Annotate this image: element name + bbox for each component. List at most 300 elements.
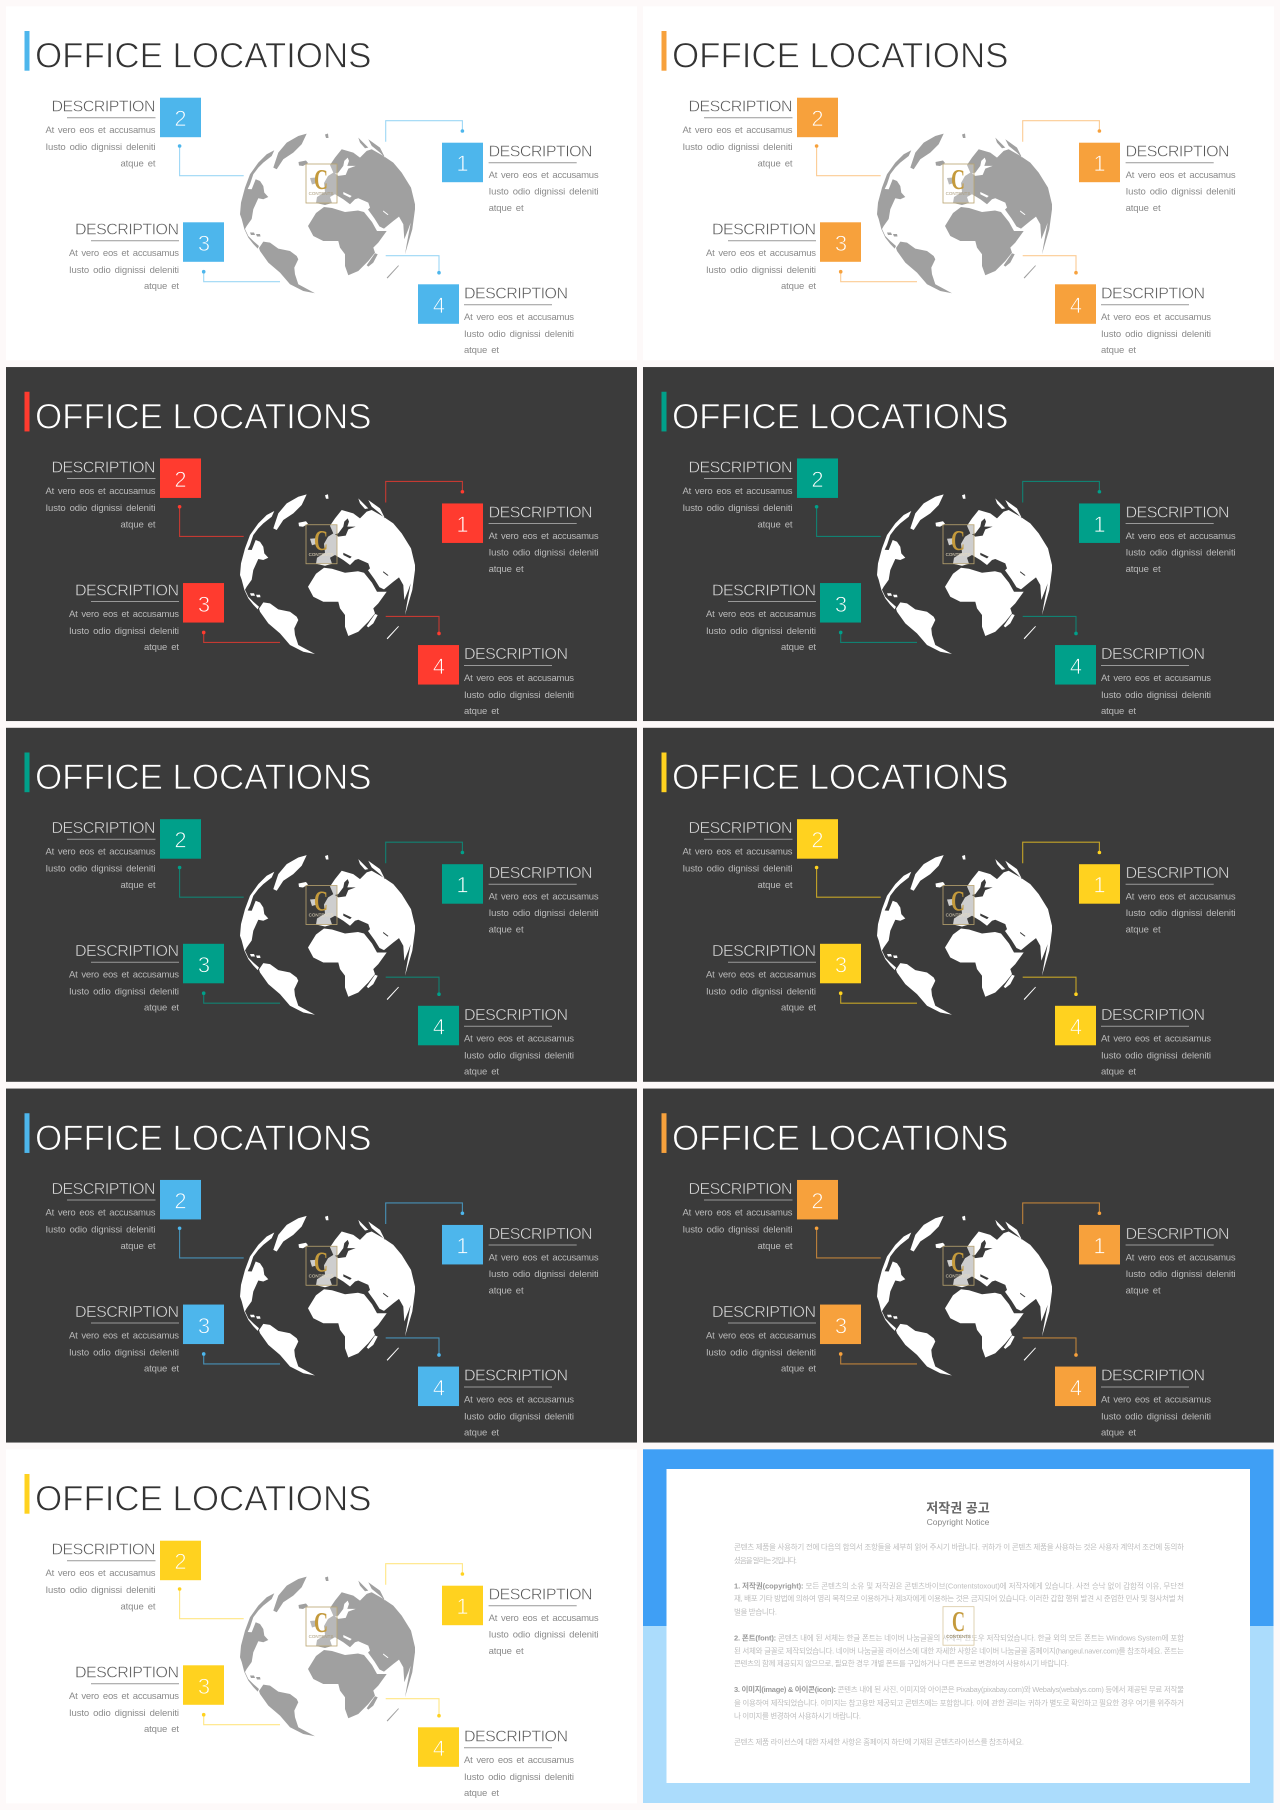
icon: globe	[240, 134, 415, 293]
slide 1: blue on white	[6, 6, 637, 360]
callout 3: At vero eos et accusamus	[69, 248, 179, 259]
title accent bar	[662, 752, 666, 792]
callout 4: At vero eos et accusamus	[464, 1394, 574, 1405]
callout 2: At vero eos et accusamus	[46, 1207, 156, 1218]
logo watermark: CONTENTS	[946, 912, 970, 918]
callout 2: 2	[174, 1549, 187, 1574]
logo watermark: C	[951, 525, 965, 557]
callout 4: At vero eos et accusamus	[1101, 1034, 1211, 1044]
connectors	[178, 121, 464, 282]
logo watermark: CONTENTS	[309, 552, 333, 557]
callout 4: Iusto odio dignissi deleniti	[464, 1411, 574, 1422]
callout 2: 2	[174, 828, 187, 852]
callout 1: atque et	[489, 1646, 524, 1657]
callout 4: 4	[433, 293, 445, 318]
callout 1: Iusto odio dignissi deleniti	[1126, 186, 1236, 198]
callout 4: Iusto odio dignissi deleniti	[464, 329, 574, 340]
logo watermark: CONTENTS	[946, 552, 970, 557]
callout 3: DESCRIPTION	[75, 1304, 179, 1321]
slide 9: yellow on white	[6, 1449, 637, 1803]
callout 1: At vero eos et accusamus	[1126, 170, 1236, 181]
notice subheading: Copyright Notice	[927, 1517, 990, 1527]
callout 4: 4	[433, 1014, 445, 1040]
callout 3: At vero eos et accusamus	[706, 248, 816, 259]
callout 4: At vero eos et accusamus	[1101, 673, 1211, 684]
callout 2: atque et	[758, 880, 793, 891]
callout 1: At vero eos et accusamus	[1126, 892, 1236, 902]
connectors	[178, 1564, 464, 1725]
slide background	[6, 728, 637, 1082]
panel: copyright notice slide	[643, 1449, 1274, 1803]
notice body text: 을 이용하여 제작되었습니다. 이미지는 참고용만 제공되고 콘텐츠에는 포함합니다. 이에 관한 권리는 귀하가 별도로 확인하고 필요한 경우 여기를 위주하거	[734, 1698, 1184, 1708]
callout 3: At vero eos et accusamus	[706, 970, 816, 980]
callout 4: 4	[1070, 1014, 1082, 1040]
callout 2: Iusto odio dignissi deleniti	[46, 142, 156, 153]
connectors	[815, 121, 1101, 282]
title accent bar	[662, 392, 666, 431]
callout 4: DESCRIPTION	[464, 285, 568, 302]
title: OFFICE LOCATIONS	[35, 37, 372, 76]
logo watermark	[943, 886, 974, 924]
callout 2: At vero eos et accusamus	[46, 1568, 156, 1579]
callout 4: DESCRIPTION	[1101, 1368, 1205, 1385]
callout 4: Iusto odio dignissi deleniti	[464, 1772, 574, 1783]
callout 4: Iusto odio dignissi deleniti	[1101, 1050, 1211, 1062]
callout 3: 3	[198, 1313, 210, 1338]
callout 1	[1079, 1225, 1236, 1296]
callout 2: DESCRIPTION	[52, 459, 156, 476]
callout 4: atque et	[464, 706, 499, 717]
callout 4: DESCRIPTION	[464, 646, 568, 663]
callout 2: At vero eos et accusamus	[682, 1207, 793, 1218]
callout 2: DESCRIPTION	[52, 820, 156, 837]
callout 1: DESCRIPTION	[489, 1586, 593, 1604]
title: OFFICE LOCATIONS	[672, 1119, 1008, 1158]
title: OFFICE LOCATIONS	[35, 1119, 372, 1158]
callout 4: 4	[1070, 293, 1082, 318]
callout 2: At vero eos et accusamus	[46, 486, 156, 497]
callout 3: DESCRIPTION	[75, 1664, 179, 1682]
callout 3: DESCRIPTION	[75, 222, 179, 238]
title accent bar	[662, 1113, 666, 1153]
callout 1: atque et	[1126, 1285, 1161, 1296]
callout 3	[706, 943, 861, 1014]
callout 3: atque et	[144, 1724, 179, 1735]
callout 3: 3	[835, 1313, 847, 1338]
title: OFFICE LOCATIONS	[35, 1480, 372, 1519]
connectors	[815, 481, 1101, 642]
callout 4: DESCRIPTION	[464, 1368, 568, 1385]
callout 2: 2	[174, 467, 187, 492]
callout 2: At vero eos et accusamus	[46, 846, 156, 858]
title: OFFICE LOCATIONS	[35, 758, 372, 797]
callout 2: Iusto odio dignissi deleniti	[682, 864, 792, 874]
callout 4: atque et	[464, 1427, 499, 1438]
callout 4: DESCRIPTION	[1101, 1007, 1205, 1024]
callout 4: DESCRIPTION	[1101, 285, 1205, 302]
logo watermark	[306, 525, 337, 564]
callout 4: At vero eos et accusamus	[464, 1755, 574, 1766]
callout 4: 4	[433, 1375, 445, 1400]
callout 4: atque et	[1101, 706, 1136, 717]
callout 1: atque et	[489, 924, 524, 936]
blue frame top	[643, 1449, 1274, 1626]
icon: globe	[240, 1216, 415, 1376]
callout 1: DESCRIPTION	[1126, 144, 1230, 160]
title accent bar	[24, 752, 30, 792]
callout 2: atque et	[120, 158, 156, 170]
callout 2: atque et	[120, 1241, 156, 1252]
logo watermark: C	[314, 886, 328, 918]
callout 3: DESCRIPTION	[712, 582, 816, 599]
callout 1: DESCRIPTION	[489, 504, 593, 521]
logo watermark: C	[314, 1607, 328, 1639]
callout 3: 3	[835, 952, 847, 978]
callout 1: At vero eos et accusamus	[1126, 531, 1236, 542]
callout 4: atque et	[1101, 1427, 1136, 1438]
slide background	[6, 6, 637, 360]
callout 1: 1	[456, 1594, 469, 1619]
title: OFFICE LOCATIONS	[672, 397, 1008, 436]
callout 1: DESCRIPTION	[489, 865, 593, 882]
logo watermark: CONTENTS	[946, 1634, 971, 1639]
callout 3	[706, 222, 861, 292]
callout 4: DESCRIPTION	[1101, 646, 1205, 663]
callout 3: Iusto odio dignissi deleniti	[706, 265, 816, 276]
callout 2: DESCRIPTION	[52, 98, 156, 116]
callout 3: atque et	[144, 281, 179, 292]
notice body text: 콘텐츠의 함께 제공되지 않으므로, 필요한 경우 개별 폰트를 구입하거나 다른 폰트로 변경하여 사용하시기 바랍니다.	[734, 1658, 1069, 1668]
callout 4	[1055, 1006, 1211, 1078]
callout 2: Iusto odio dignissi deleniti	[682, 142, 792, 153]
callout 4	[418, 1727, 574, 1799]
notice body text: 된 서체와 글꼴로 제작되었습니다. 네이버 나눔글꼴 라이선스에 대한 자세한 사항은 네이버 나눔글꼴 홈페이지(hangeul.naver.com)를 참조하세요. 폰트는	[734, 1646, 1184, 1656]
callout 2: Iusto odio dignissi deleniti	[46, 864, 156, 874]
title accent bar	[24, 392, 30, 431]
callout 3	[69, 582, 224, 653]
icon: globe	[240, 494, 415, 654]
icon: globe	[877, 494, 1052, 654]
callout 1: Iusto odio dignissi deleniti	[1126, 908, 1236, 919]
callout 2	[682, 458, 838, 530]
callout 1	[442, 143, 599, 214]
callout 4: Iusto odio dignissi deleniti	[1101, 690, 1211, 701]
callout 3: Iusto odio dignissi deleniti	[69, 626, 179, 637]
title: OFFICE LOCATIONS	[672, 37, 1008, 76]
callout 2: 2	[174, 106, 187, 131]
callout 2: atque et	[758, 519, 793, 530]
callout 2: DESCRIPTION	[52, 1181, 156, 1198]
callout 3	[69, 1664, 224, 1735]
slide 6: yellow on dark	[643, 728, 1274, 1082]
callout 2: At vero eos et accusamus	[682, 846, 793, 858]
callout 3: atque et	[781, 642, 816, 653]
callout 1: 1	[456, 151, 469, 176]
callout 3: atque et	[144, 1363, 179, 1374]
callout 4	[1055, 645, 1211, 717]
title accent bar	[662, 31, 666, 71]
callout 3: At vero eos et accusamus	[69, 609, 179, 620]
logo watermark: CONTENTS	[946, 191, 970, 196]
callout 3: Iusto odio dignissi deleniti	[69, 265, 179, 276]
callout 3: At vero eos et accusamus	[706, 1330, 816, 1341]
connectors	[178, 1203, 464, 1364]
callout 3: DESCRIPTION	[75, 582, 179, 599]
callout 1: 1	[456, 512, 469, 537]
callout 3: DESCRIPTION	[712, 943, 816, 960]
callout 3: DESCRIPTION	[712, 1304, 816, 1321]
callout 1: DESCRIPTION	[1126, 504, 1230, 521]
title accent bar	[24, 1113, 30, 1153]
callout 3: Iusto odio dignissi deleniti	[706, 1347, 816, 1358]
icon: globe	[240, 855, 415, 1015]
logo watermark: C	[314, 525, 328, 557]
callout 2: Iusto odio dignissi deleniti	[682, 503, 792, 514]
callout 1: 1	[1093, 872, 1106, 898]
callout 3: atque et	[144, 1002, 179, 1014]
icon: globe	[240, 1576, 415, 1736]
slide 3: red on dark	[6, 367, 637, 721]
logo watermark	[306, 164, 337, 203]
title accent bar	[24, 1474, 30, 1514]
callout 1: At vero eos et accusamus	[489, 170, 599, 181]
icon: globe	[877, 134, 1052, 293]
callout 4	[418, 1367, 574, 1438]
logo watermark	[306, 886, 337, 924]
callout 4	[418, 284, 574, 356]
callout 4	[1055, 1367, 1211, 1438]
callout 4: At vero eos et accusamus	[1101, 1394, 1211, 1405]
callout 1: At vero eos et accusamus	[489, 531, 599, 542]
callout 3: Iusto odio dignissi deleniti	[706, 986, 816, 998]
logo watermark	[943, 525, 974, 564]
callout 3	[69, 1304, 224, 1374]
callout 2: DESCRIPTION	[688, 820, 792, 837]
callout 3: Iusto odio dignissi deleniti	[69, 1708, 179, 1719]
callout 1: Iusto odio dignissi deleniti	[1126, 547, 1236, 558]
callout 2: Iusto odio dignissi deleniti	[46, 1585, 156, 1596]
callout 2: At vero eos et accusamus	[682, 125, 793, 136]
logo watermark	[943, 1246, 974, 1285]
callout 2	[46, 1541, 201, 1612]
callout 2: DESCRIPTION	[688, 1181, 792, 1198]
callout 1: At vero eos et accusamus	[1126, 1252, 1236, 1263]
callout 1: 1	[1093, 1233, 1106, 1258]
callout 4: atque et	[464, 1788, 499, 1799]
callout 3: 3	[835, 592, 847, 617]
callout 3	[706, 582, 861, 653]
callout 1	[1079, 864, 1236, 936]
callout 1: atque et	[489, 203, 524, 214]
notice body text: 벌을 받습니다.	[734, 1606, 777, 1616]
logo watermark: C	[951, 164, 965, 196]
callout 3: Iusto odio dignissi deleniti	[69, 1347, 179, 1358]
callout 2: DESCRIPTION	[52, 1542, 156, 1558]
callout 2: At vero eos et accusamus	[46, 125, 156, 136]
logo watermark	[943, 164, 974, 203]
notice body text: 셨음을 알리는 것입니다.	[734, 1555, 797, 1565]
notice body text	[734, 1542, 1184, 1746]
callout 4: Iusto odio dignissi deleniti	[1101, 1411, 1211, 1422]
callout 2: 2	[811, 828, 824, 852]
light blue frame bottom	[643, 1626, 1274, 1803]
callout 2: atque et	[120, 880, 156, 891]
callout 4: At vero eos et accusamus	[464, 673, 574, 684]
callout 1: atque et	[1126, 924, 1161, 936]
callout 4	[418, 1006, 574, 1078]
callout 4: At vero eos et accusamus	[464, 1034, 574, 1044]
logo watermark: C	[951, 1246, 965, 1278]
callout 3: At vero eos et accusamus	[69, 1330, 179, 1341]
title: OFFICE LOCATIONS	[35, 397, 372, 436]
connectors	[178, 481, 464, 642]
notice body text: 콘텐츠 제품을 사용하기 전에 다음의 합의서 조항들을 세부히 읽어 주시기 바랍니다. 귀하가 이 콘텐츠 제품을 사용하는 것은 사용자 계약서 조건에 동의하	[734, 1542, 1184, 1552]
callout 1: 1	[456, 1233, 469, 1258]
connectors	[178, 842, 464, 1003]
callout 3: atque et	[781, 281, 816, 292]
callout 2: 2	[811, 467, 824, 492]
callout 2: Iusto odio dignissi deleniti	[46, 503, 156, 514]
callout 2: 2	[174, 1188, 187, 1213]
callout 1: Iusto odio dignissi deleniti	[489, 547, 599, 558]
callout 1: 1	[1093, 151, 1106, 176]
callout 2: atque et	[758, 158, 793, 170]
callout 1	[442, 864, 599, 936]
callout 2	[46, 98, 201, 170]
callout 4: 4	[433, 1736, 445, 1761]
slide background	[643, 1089, 1274, 1443]
callout 2: At vero eos et accusamus	[682, 486, 793, 497]
notice body text: 재, 배포 기타 방법에 의하여 영리 목적으로 이용하거나 제3자에게 이용하는 것은 금지되어 있습니다. 이러한 갑합 행위 발견 시 준엄한 민사 및 형사처벌 처	[734, 1593, 1184, 1603]
logo watermark: C	[951, 886, 965, 918]
callout 4: 4	[1070, 1375, 1082, 1400]
callout 4: At vero eos et accusamus	[1101, 312, 1211, 323]
callout 4: atque et	[464, 345, 499, 356]
callout 4	[1055, 284, 1211, 356]
callout 3: 3	[198, 231, 210, 256]
slide 8: orange on dark	[643, 1089, 1274, 1443]
callout 3: DESCRIPTION	[75, 943, 179, 960]
notice body text: 2. 폰트(font): 콘텐츠 내에 된 서체는 한글 폰트는 네이버 나눔글꼴의 서체와 윈도우 저작되었습니다. 한글 외의 모든 폰트는 Windows System에 포함	[734, 1632, 1184, 1642]
callout 3: At vero eos et accusamus	[706, 609, 816, 620]
callout 3: Iusto odio dignissi deleniti	[69, 986, 179, 998]
callout 4: Iusto odio dignissi deleniti	[464, 690, 574, 701]
callout 4: At vero eos et accusamus	[464, 312, 574, 323]
icon: globe	[877, 855, 1052, 1015]
callout 1: DESCRIPTION	[1126, 1226, 1230, 1243]
callout 3	[69, 222, 224, 292]
slide 5: teal on dark	[6, 728, 637, 1082]
notice heading: 저작권 공고	[926, 1500, 990, 1516]
callout 1: DESCRIPTION	[489, 1226, 593, 1243]
callout 1: atque et	[489, 1285, 524, 1296]
callout 4: atque et	[1101, 345, 1136, 356]
callout 1: atque et	[489, 564, 524, 575]
logo watermark: C	[952, 1606, 965, 1638]
callout 4: atque et	[1101, 1066, 1136, 1078]
callout 1: Iusto odio dignissi deleniti	[489, 1630, 599, 1640]
callout 1: 1	[1093, 512, 1106, 537]
callout 1: Iusto odio dignissi deleniti	[489, 1269, 599, 1280]
slide background	[643, 728, 1274, 1082]
notice body text: 3. 이미지(image) & 아이콘(icon): 콘텐츠 내에 된 사진, 이미지와 아이콘은 Pixabay(pixabay.com)와 Webalys(webalys.com) 등에서 제공된 무료 저작물	[734, 1684, 1184, 1694]
callout 2: atque et	[758, 1241, 793, 1252]
callout 3: atque et	[144, 642, 179, 653]
logo watermark	[306, 1607, 337, 1646]
callout 1: atque et	[1126, 203, 1161, 214]
callout 1	[442, 1586, 599, 1657]
callout 1	[442, 503, 599, 575]
callout 4: 4	[1070, 654, 1082, 679]
logo watermark	[306, 1246, 337, 1285]
callout 2	[46, 819, 201, 891]
logo watermark: CONTENTS	[309, 912, 333, 918]
slide background	[643, 6, 1274, 360]
callout 4: atque et	[464, 1066, 499, 1078]
icon: globe	[877, 1216, 1052, 1376]
callout 2: Iusto odio dignissi deleniti	[682, 1224, 792, 1235]
callout 4: DESCRIPTION	[464, 1728, 568, 1745]
connectors	[815, 842, 1101, 1003]
callout 3: 3	[198, 952, 210, 978]
callout 2	[46, 458, 201, 530]
callout 1: DESCRIPTION	[1126, 865, 1230, 882]
callout 3: atque et	[781, 1002, 816, 1014]
slide background	[6, 1089, 637, 1443]
callout 3: DESCRIPTION	[712, 222, 816, 238]
white notice card	[666, 1469, 1250, 1783]
title: OFFICE LOCATIONS	[672, 758, 1008, 797]
callout 1: atque et	[1126, 564, 1161, 575]
callout 2: Iusto odio dignissi deleniti	[46, 1224, 156, 1235]
slide 7: blue on dark	[6, 1089, 637, 1443]
logo watermark: CONTENTS	[309, 1273, 333, 1278]
callout 3: At vero eos et accusamus	[69, 1691, 179, 1702]
title accent bar	[24, 31, 30, 71]
callout 2: DESCRIPTION	[688, 98, 792, 116]
callout 1: At vero eos et accusamus	[489, 892, 599, 902]
callout 3: 3	[198, 592, 210, 617]
callout 4: 4	[433, 654, 445, 679]
slide 2: orange on white	[643, 6, 1274, 360]
callout 1: DESCRIPTION	[489, 144, 593, 160]
slide background	[643, 367, 1274, 721]
callout 2: atque et	[120, 1602, 156, 1612]
callout 1: Iusto odio dignissi deleniti	[489, 186, 599, 198]
logo watermark: CONTENTS	[309, 1634, 333, 1639]
callout 4: Iusto odio dignissi deleniti	[464, 1050, 574, 1062]
callout 2	[46, 1180, 201, 1252]
callout 1: Iusto odio dignissi deleniti	[1126, 1269, 1236, 1280]
slide 4: teal on dark	[643, 367, 1274, 721]
callout 2: DESCRIPTION	[688, 459, 792, 476]
callout 2	[682, 819, 838, 891]
notice body text: 콘텐츠 제품 라이선스에 대한 자세한 사항은 홈페이지 하단에 기재된 콘텐츠라이선스를 참조하세요.	[734, 1736, 1024, 1746]
notice body text: 1. 저작권(copyright): 모든 콘텐츠의 소유 및 저작권은 콘텐츠바이브(Contentstoxout)에 저작자에게 있습니다. 사전 승낙 없이 갑합적 이유, 무단전	[734, 1580, 1184, 1590]
connectors	[815, 1203, 1101, 1364]
logo watermark: C	[314, 164, 328, 196]
slide background	[6, 1449, 637, 1803]
callout 3	[706, 1304, 861, 1374]
callout 2: atque et	[120, 519, 156, 530]
callout 2: 2	[811, 1188, 824, 1213]
notice body text: 나 이미지를 변경하여 사용하시기 바랍니다.	[734, 1710, 861, 1720]
callout 2	[682, 1180, 838, 1252]
callout 4	[418, 645, 574, 717]
callout 3: 3	[198, 1674, 210, 1699]
callout 2	[682, 98, 838, 170]
callout 1	[1079, 143, 1236, 214]
